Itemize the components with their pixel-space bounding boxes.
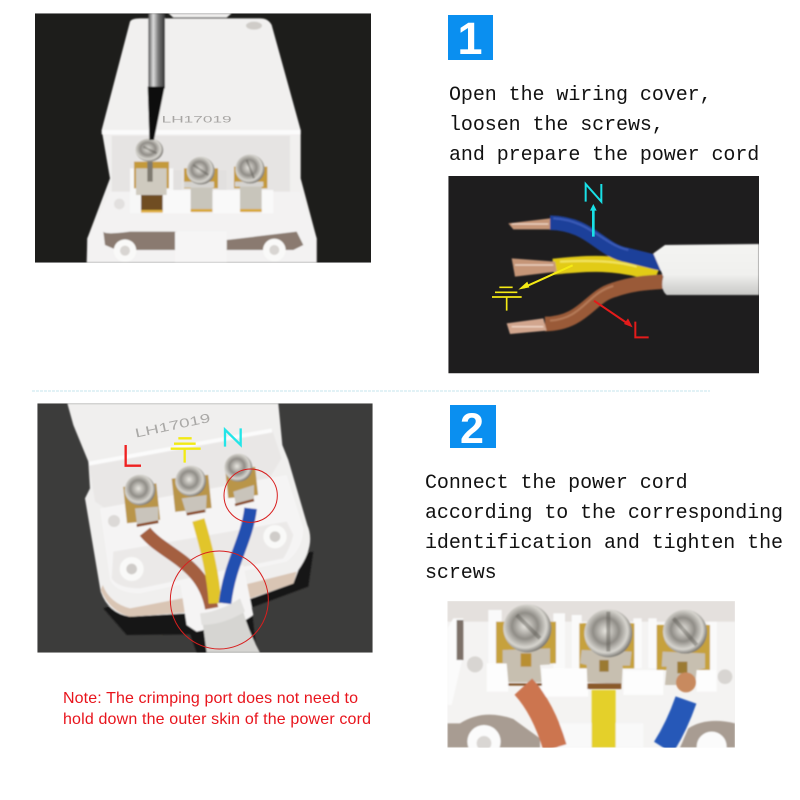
terminal label N (225, 428, 241, 447)
photo: close-up of connected terminals (447, 601, 735, 762)
step badge 1 (448, 13, 493, 64)
middle terminal (184, 168, 218, 188)
step 1 instructions: loosen the screws, (449, 114, 664, 137)
crimping note: Note: The crimping port does not need to (63, 690, 358, 707)
photo: stripped power cord with N, earth and L labels (448, 176, 759, 373)
step 2 instructions: Connect the power cord (425, 472, 688, 495)
label L arrow (594, 301, 649, 337)
step badge 1: 1 (457, 13, 483, 64)
photo: wired terminals with red inspection circles (37, 403, 373, 653)
step badge 2: 2 (460, 405, 484, 453)
step 2 instructions: screws (425, 562, 497, 585)
step badge 2 (450, 405, 496, 453)
terminal label L (126, 445, 141, 466)
label N arrow (586, 184, 601, 237)
crimping note: hold down the outer skin of the power cord (63, 711, 371, 728)
step 2 instructions: according to the corresponding (425, 502, 783, 525)
inspection circles (170, 469, 277, 649)
divider (32, 390, 710, 392)
model number on housing: LH17019 (162, 114, 232, 124)
right terminal (234, 167, 267, 188)
step 1 instructions: and prepare the power cord (449, 144, 759, 167)
step 1 instructions: Open the wiring cover, (449, 84, 712, 107)
step 2 instructions: identification and tighten the (425, 532, 783, 555)
earth label arrow (492, 265, 573, 311)
photo: screwdriver loosening terminal screws (35, 13, 371, 263)
terminal label earth (171, 438, 201, 463)
left terminal (134, 162, 169, 188)
model number on housing: LH17019 (134, 411, 212, 441)
